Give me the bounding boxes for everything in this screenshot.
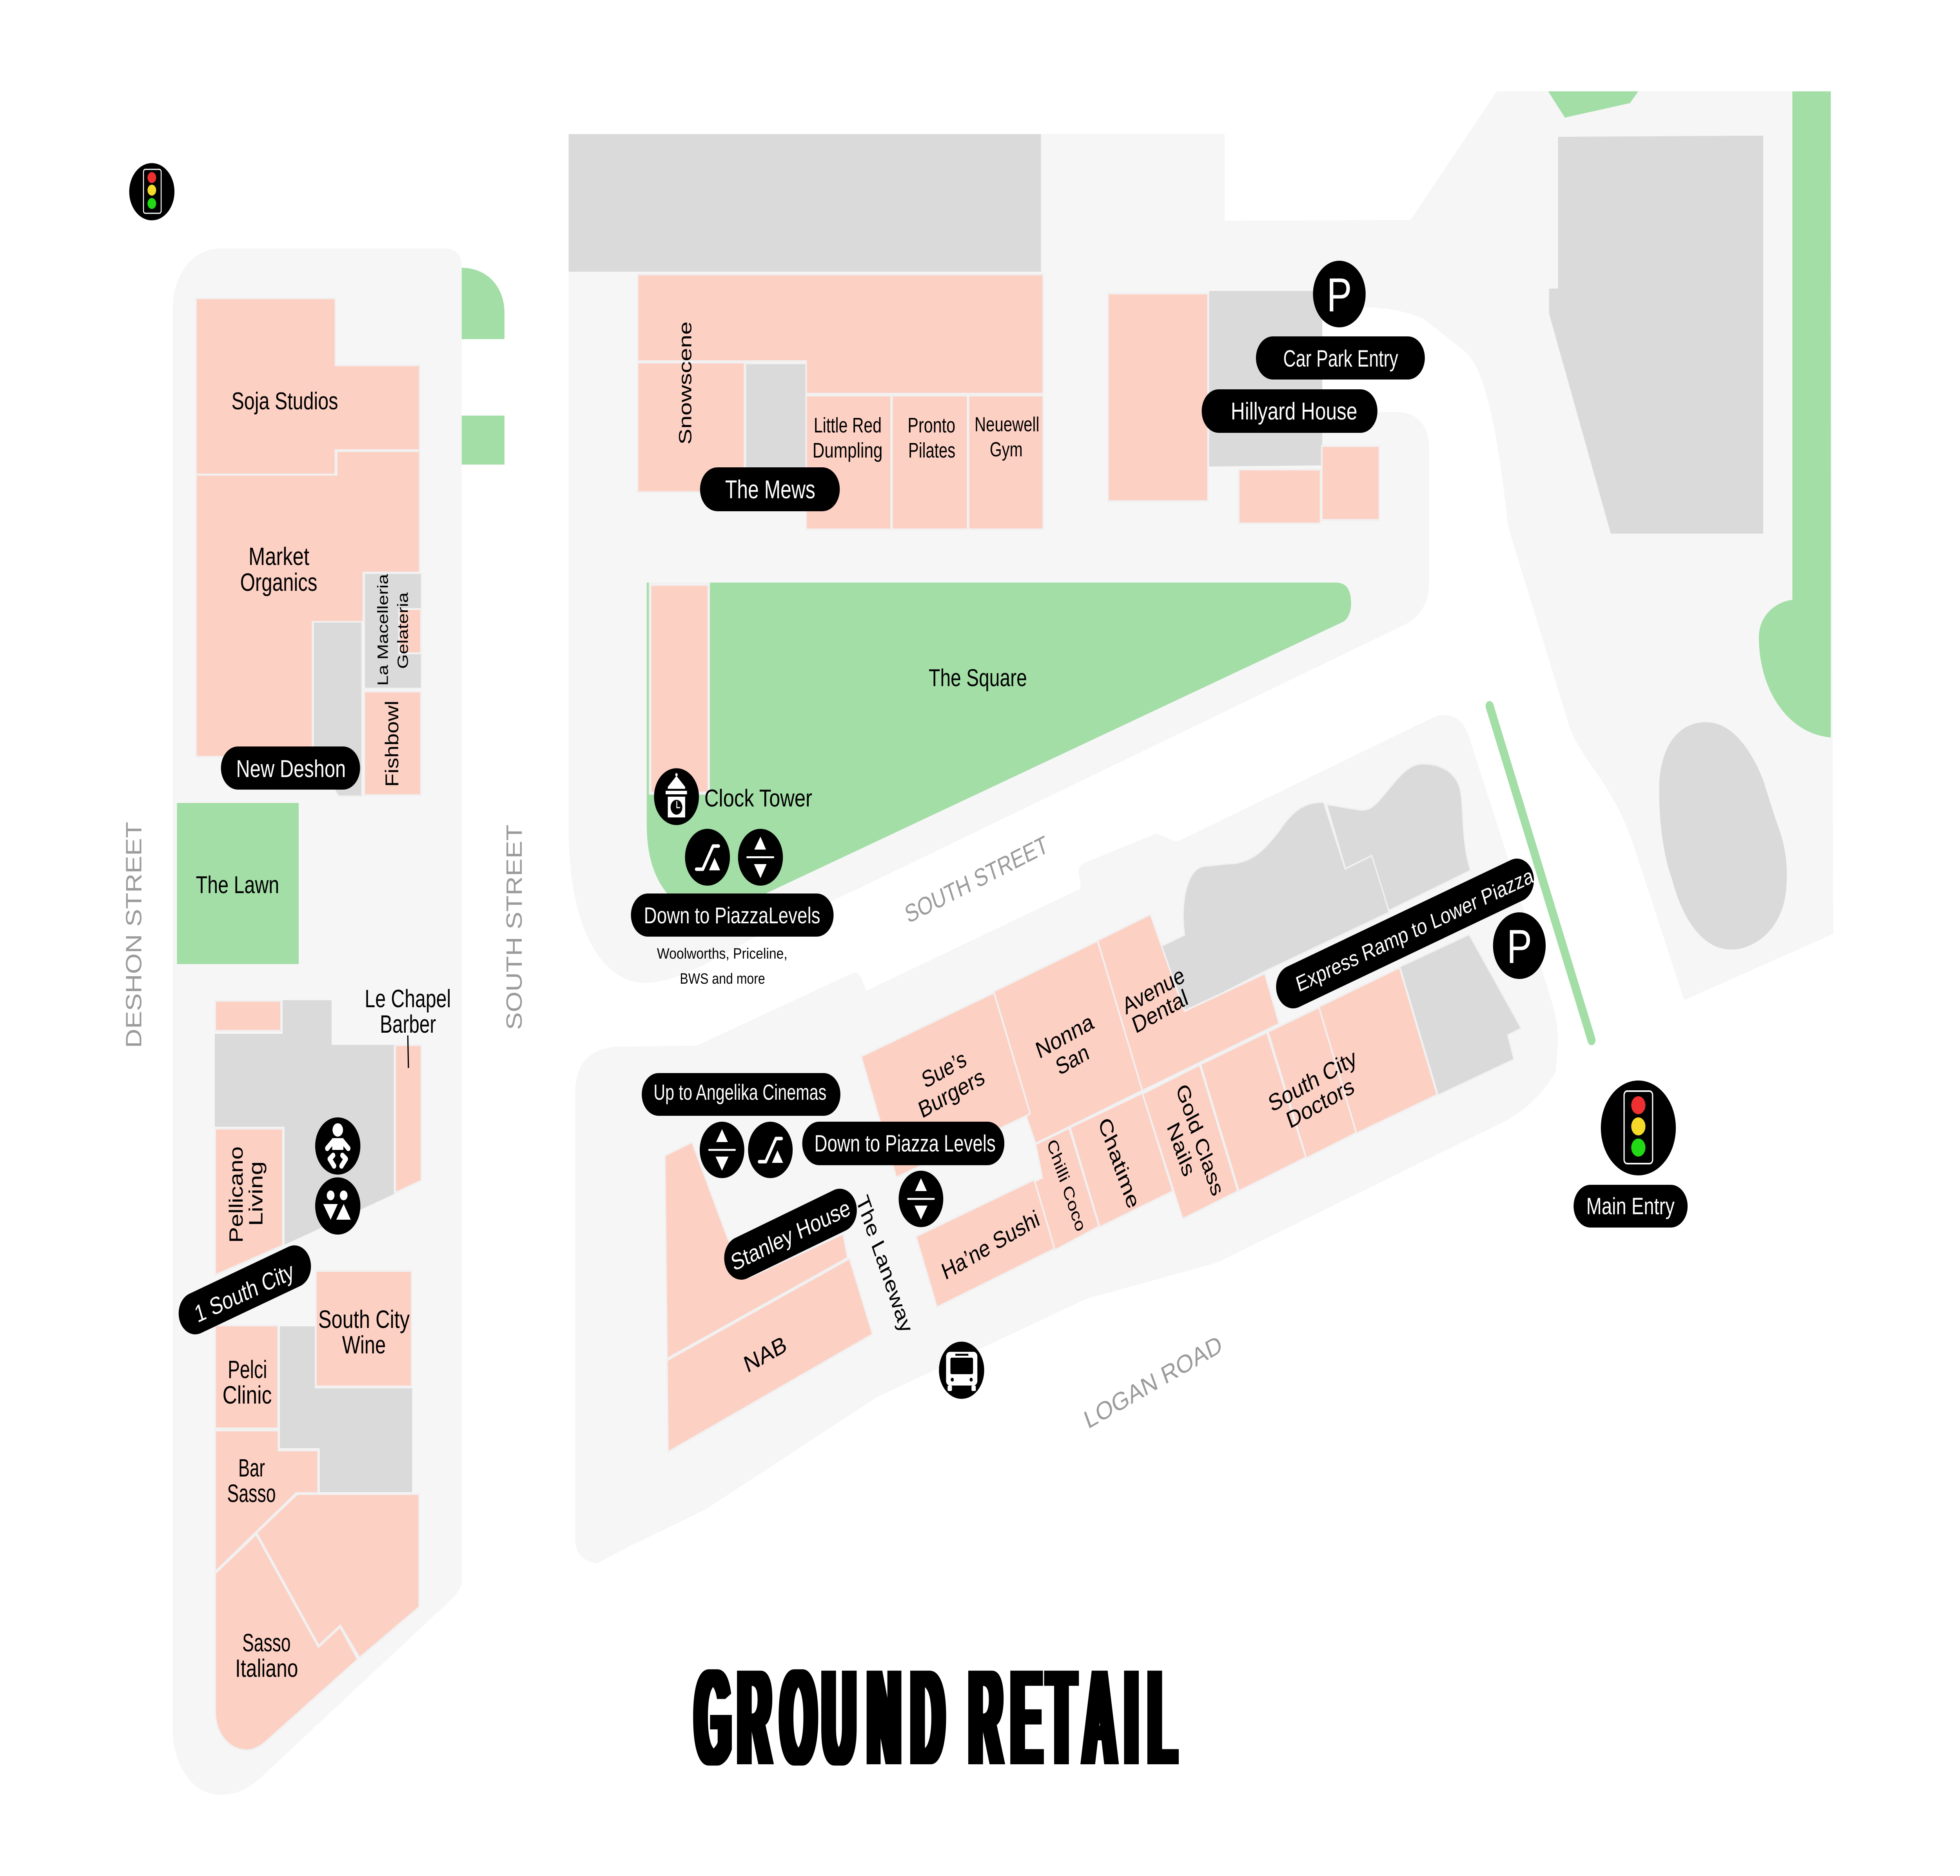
shop: Sue's Burgers: Burgers: [915, 1064, 988, 1123]
shop: La Macelleria: La Macelleria: [375, 574, 391, 686]
grey core lower: [280, 1326, 412, 1492]
icon: lift laneway: [898, 1171, 943, 1227]
text: tenants on piazza levels: Woolworths, Priceline,: [657, 946, 788, 962]
pill: Hillyard House: [1202, 389, 1377, 433]
panel: east precinct: [1548, 91, 1831, 950]
pill: Main Entry: Main Entry: [1586, 1193, 1675, 1219]
shop: Pelci Clinic: Clinic: [223, 1381, 272, 1409]
green square: [647, 583, 1351, 906]
icon: car park P north: P: [1327, 268, 1352, 322]
pill: Car Park Entry: Car Park Entry: [1283, 346, 1398, 372]
shop: Chatime: Chatime: [1094, 1114, 1144, 1212]
pill: Down to Piazza Levels: [802, 1122, 1004, 1165]
shop: Sasso Italiano: [216, 1536, 357, 1749]
shop: Stanley House retail: [666, 1143, 847, 1357]
icon: car park P north: [1313, 261, 1366, 327]
street label: Logan Road: LOGAN ROAD: [1081, 1330, 1226, 1434]
shop: Sue's Burgers: [862, 994, 1029, 1176]
pill: 1 South City: 1 South City: [192, 1257, 297, 1328]
pill: Down to Piazza Levels west: Down to PiazzaLevels: [644, 903, 820, 928]
back of house grey: [314, 623, 361, 795]
shop: Chatime: [1071, 1094, 1172, 1226]
shop: Hillyard west: [1109, 294, 1207, 500]
street label: Deshon Street: DESHON STREET: [121, 822, 146, 1048]
grey building south east: [1401, 935, 1520, 1094]
shop: Pronto Pilates: [893, 396, 967, 528]
pill: Stanley House: Stanley House: [728, 1195, 853, 1276]
title: GROUND RETAIL: [695, 1641, 1176, 1793]
shop: Le Chapel Barber: Le Chapel: [365, 985, 451, 1013]
pill: Up to Angelika Cinemas: [642, 1073, 840, 1116]
shop: Neuewell Gym: [969, 396, 1042, 528]
icon: traffic light north west: [129, 163, 174, 220]
shop: Fishbowl: [365, 692, 420, 794]
grey core Hillyard: [1209, 291, 1322, 467]
shop: Little Red Dumpling: [807, 396, 890, 528]
shop: Pronto Pilates: Pronto: [907, 414, 955, 437]
shop: Nonna San: Nonna: [1033, 1008, 1097, 1064]
shop: Market Organics: Organics: [240, 568, 317, 596]
shop: Pellicano Living: Pellicano: [225, 1146, 247, 1243]
shop: Soja Studios: Soja Studios: [232, 387, 338, 414]
pill: Up to Angelika Cinemas: Up to Angelika Cinemas: [653, 1080, 826, 1104]
shop: Hillyard south: [1240, 470, 1320, 523]
shop: Sue's Burgers: Sue’s: [918, 1046, 969, 1093]
shop: Avenue Dental: Avenue: [1119, 962, 1188, 1019]
panel: Deshon block: [172, 249, 505, 1795]
icon: lift: [738, 829, 783, 886]
icon: escalator west: [748, 1122, 793, 1178]
unnamed shop lower right: [258, 1495, 418, 1656]
icon: escalator: [685, 829, 730, 886]
panel: Hillyard House block: [1109, 261, 1425, 523]
icon: bus stop: [939, 1342, 984, 1399]
icon: lift west: [700, 1122, 744, 1178]
pill: Down to Piazza Levels: Down to Piazza Levels: [814, 1131, 996, 1157]
grey building curved west: [1162, 803, 1388, 1013]
icon: traffic light main entry: [1601, 1081, 1676, 1175]
panel: The Mews block: [569, 134, 1042, 528]
text: tenants on piazza levels: BWS and more: [680, 971, 765, 987]
street label: South Street angled: SOUTH STREET: [902, 831, 1051, 929]
shop: Pellicano Living: Living: [245, 1161, 267, 1226]
background: footpaths of central and eastern precinct: [569, 91, 1833, 1000]
The Lawn: The Lawn: [196, 871, 279, 898]
shop: Little Red Dumpling: Dumpling: [813, 439, 882, 462]
pill: Hillyard House: Hillyard House: [1231, 397, 1357, 425]
shop: NAB: NAB: [740, 1331, 790, 1378]
grey service core: [746, 364, 806, 474]
shop: Neuewell Gym: Gym: [990, 438, 1023, 461]
shop: NAB: [668, 1260, 872, 1451]
small shop top: [216, 1002, 280, 1030]
shop: Gelateria: Gelateria: [395, 592, 411, 669]
shop: Pellicano Living: [216, 1130, 282, 1274]
panel: The Square: [631, 583, 1351, 987]
shop: Gold Class Nails: Gold Class: [1172, 1080, 1228, 1200]
pill: New Deshon: New Deshon: [236, 755, 346, 782]
shop: Snowscene: [638, 275, 1042, 491]
label: The Laneway: The Laneway: [852, 1191, 917, 1337]
shop: South City Wine: South City: [318, 1306, 410, 1333]
building oval: [1659, 722, 1787, 950]
pill: Down to Piazza Levels west: [631, 894, 833, 937]
icon: car park P south: P: [1507, 920, 1532, 973]
panel: South City retail block: [575, 715, 1558, 1564]
street label: South Street vertical: SOUTH STREET: [501, 824, 527, 1030]
shop: Chilli Coco: [1036, 1129, 1098, 1249]
shop: Nonna San: [995, 942, 1143, 1142]
icon: car park P south: [1493, 912, 1546, 979]
shop: clock tower retail: [650, 584, 709, 793]
shop: South City Wine: Wine: [342, 1331, 386, 1359]
shop: Avenue Dental: [1098, 915, 1278, 1090]
grey building north: [569, 134, 1041, 272]
shop: South City Doctors: South City: [1265, 1045, 1360, 1117]
shop: La Macelleria: [365, 574, 421, 688]
shop: Ha'ne Sushi: [917, 1181, 1054, 1306]
shop: Fishbowl: Fishbowl: [382, 701, 402, 787]
shop: Snowscene: Snowscene: [675, 321, 695, 445]
block footpath: [172, 249, 462, 1795]
green wedge top: [1548, 91, 1638, 118]
green garden strip: [462, 416, 505, 465]
shop: Little Red Dumpling: Little Red: [814, 414, 882, 437]
green corner garden: [462, 268, 505, 339]
pill: The Mews: [700, 467, 840, 511]
shop: Bar Sasso: Bar: [238, 1454, 265, 1482]
grey building curved east: [1328, 765, 1470, 910]
shop: Gelateria: [395, 592, 420, 669]
building east: [1549, 136, 1763, 534]
shop: Bar Sasso: [216, 1431, 317, 1570]
label: Clock Tower: Clock Tower: [704, 784, 812, 812]
shop: Sasso Italiano: Sasso: [242, 1629, 291, 1657]
pill: Main Entry: [1573, 1185, 1688, 1228]
grey core south: [215, 1000, 394, 1245]
shop: Hillyard east: [1323, 447, 1379, 519]
shop: Neuewell Gym: Neuewell: [975, 413, 1039, 436]
shop: Chilli Coco: Chilli Coco: [1044, 1136, 1089, 1235]
shop: Gold Class Nails: [1143, 1066, 1237, 1218]
shop: Nonna San: San: [1053, 1039, 1092, 1081]
shop: South City Wine: [317, 1272, 411, 1386]
shop: South City Doctors: [1201, 969, 1436, 1190]
green strip east: [1759, 91, 1831, 737]
shop: Sasso Italiano: Italiano: [235, 1654, 298, 1682]
icon: toilets: [315, 1177, 360, 1235]
shop: Gold Class Nails: Nails: [1163, 1119, 1199, 1180]
block footpath: [575, 715, 1558, 1564]
shop: Le Chapel Barber: [365, 985, 451, 1191]
pill: Express Ramp to Lower Piazza: Express Ramp to Lower Piazza: [1293, 863, 1536, 997]
label: The Square: The Square: [929, 664, 1027, 691]
icon: clock tower: [654, 768, 699, 825]
shop: Soja Studios: [197, 299, 419, 474]
text: tenants on piazza levels: [657, 946, 788, 987]
shop: Bar Sasso: Sasso: [227, 1480, 276, 1507]
green strip: express ramp: [1490, 706, 1592, 1040]
icon: baby change: [315, 1117, 360, 1175]
shop: Market Organics: [197, 452, 419, 756]
The Lawn: [177, 803, 299, 964]
shop: Avenue Dental: Dental: [1129, 984, 1191, 1039]
pill: New Deshon: [221, 746, 360, 790]
shop: Market Organics: Market: [249, 543, 309, 570]
shop: Ha'ne Sushi: Ha’ne Sushi: [938, 1205, 1043, 1285]
shop: Pronto Pilates: Pilates: [908, 439, 955, 462]
pill: The Mews: The Mews: [725, 475, 815, 504]
shop: Pelci Clinic: Pelci: [228, 1356, 267, 1384]
pill: Car Park Entry: [1256, 336, 1425, 380]
shop: South City Doctors: Doctors: [1283, 1073, 1357, 1134]
shop: Pelci Clinic: [216, 1326, 278, 1427]
shop: Le Chapel Barber: Barber: [380, 1010, 436, 1038]
